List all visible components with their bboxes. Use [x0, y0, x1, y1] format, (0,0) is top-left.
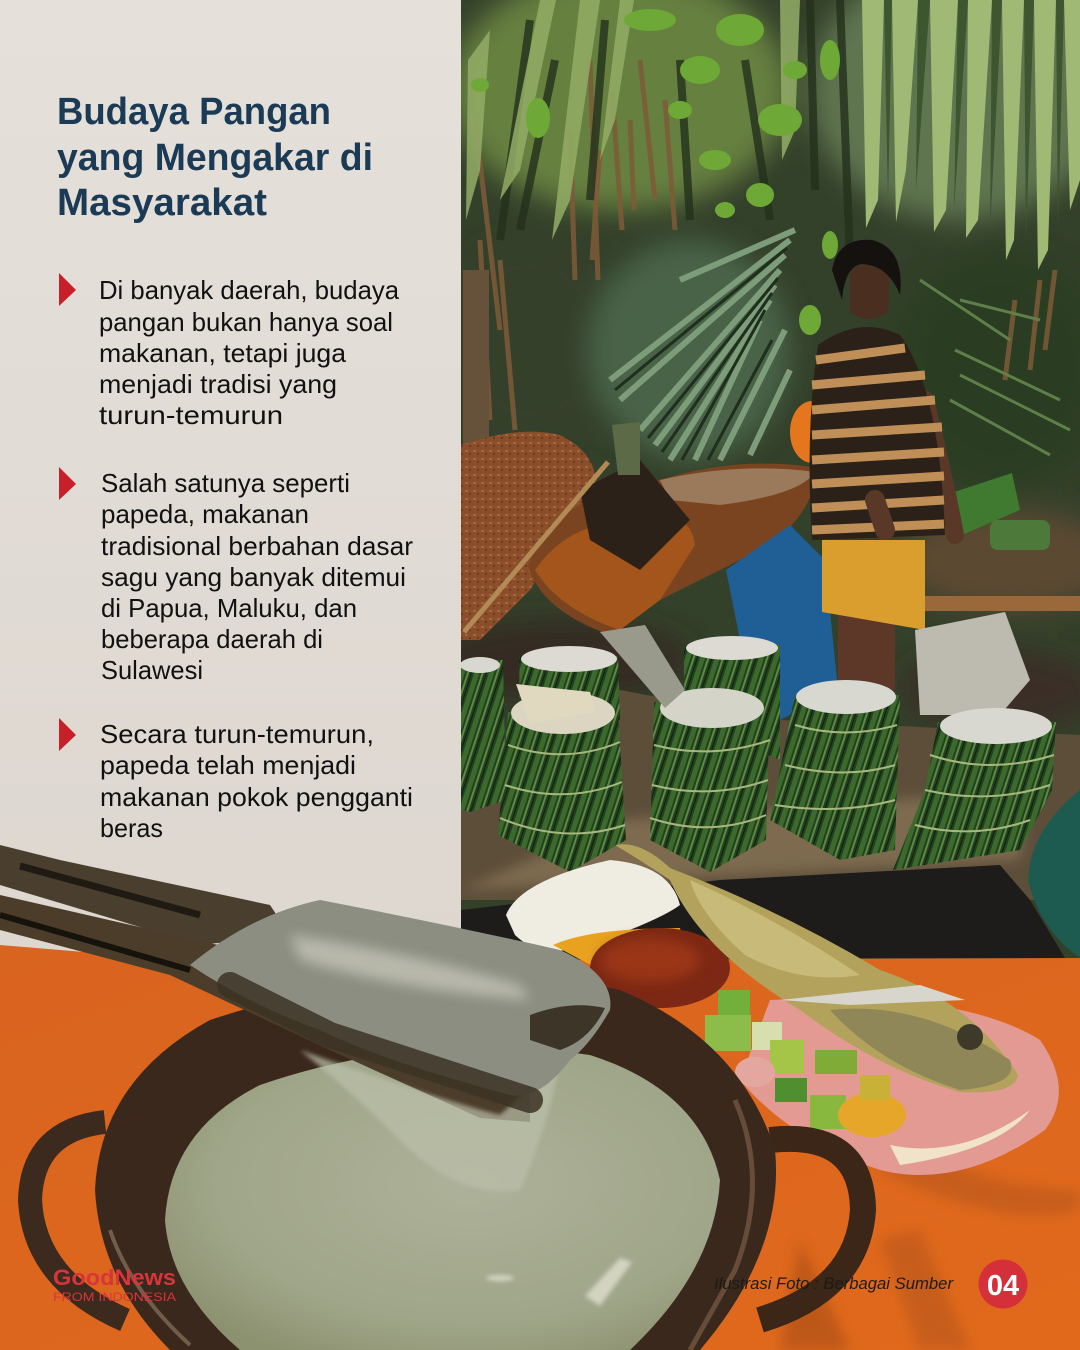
palm leaves right: [862, 0, 1080, 270]
icon: red arrow bullet: [59, 718, 76, 751]
text block 2: Salah satunya seperti: [101, 468, 350, 498]
text block 1: turun-temurun: [99, 400, 283, 430]
wooden sticks lifting papeda: [0, 845, 610, 1191]
clay bowl with papeda: [30, 975, 863, 1350]
sago pile: [461, 432, 596, 640]
text block 3: papeda telah menjadi: [100, 750, 356, 780]
forest background tones: [430, 0, 1080, 730]
pink plate: [740, 998, 1059, 1175]
plate with fish and sambal: [506, 844, 1059, 1175]
logo: GoodNews from Indonesia: GoodNews: [53, 1265, 176, 1290]
text block 2: tradisional berbahan dasar: [101, 531, 413, 561]
photo credit: Ilustrasi Foto : Berbagai Sumber: [714, 1275, 955, 1293]
text block 1: pangan bukan hanya soal: [99, 307, 393, 337]
icon: red arrow bullet: [59, 467, 76, 500]
text block 3: beras: [100, 813, 163, 843]
right side fronds: [920, 280, 1070, 455]
bullet 2: [59, 467, 413, 685]
title: Masyarakat: [57, 182, 267, 224]
bowl outer: [95, 975, 776, 1350]
highlights: [486, 1258, 632, 1306]
woman: [810, 240, 955, 690]
photo: papeda preparation in the forest: [430, 0, 1080, 960]
bench: [925, 596, 1080, 611]
title: yang Mengakar di: [57, 137, 373, 179]
translucent strand: [300, 1050, 560, 1191]
blue barrel: [726, 525, 838, 720]
ground: [461, 690, 1080, 900]
cylinder 5: [650, 688, 770, 872]
green tube: [956, 473, 1020, 534]
text block 1: Di banyak daerah, budaya: [99, 275, 400, 305]
text block 3: [100, 719, 413, 843]
cylinder 6: [770, 680, 900, 860]
cylinder 1: [460, 657, 506, 812]
cylinder 2: [519, 646, 620, 720]
stone on cylinder: [600, 625, 685, 708]
sack: [915, 612, 1030, 715]
cylinder 7: [893, 708, 1056, 870]
text block 2: sagu yang banyak ditemui: [101, 562, 406, 592]
panel: text background: [0, 0, 461, 960]
text block 3: Secara turun-temurun,: [100, 719, 374, 749]
table surface: [0, 945, 1080, 1350]
wooden trough: [528, 464, 818, 635]
cylinder 4: [498, 684, 626, 872]
papeda strand: [190, 900, 610, 1096]
text block 3: makanan pokok pengganti: [100, 782, 413, 812]
dark gaps in canopy: [500, 0, 850, 260]
text block 1: makanan, tetapi juga: [99, 338, 347, 368]
page number badge: [978, 1260, 1028, 1308]
title: Budaya Pangan: [57, 91, 331, 133]
black pan: [461, 865, 1065, 958]
orange bowl: [790, 401, 812, 463]
bullet 1: [59, 273, 400, 430]
bowl handles: [30, 1122, 125, 1320]
text block 1: menjadi tradisi yang: [99, 369, 337, 399]
mid palm frond: [610, 230, 795, 460]
text block 1: [99, 275, 400, 430]
logo: GoodNews from Indonesia: [53, 1265, 176, 1304]
text block 2: di Papua, Maluku, dan: [101, 593, 357, 623]
papeda surface: [165, 1047, 720, 1350]
icon: red arrow bullet: [59, 273, 76, 306]
green net: [1028, 790, 1080, 958]
fried fish: [615, 844, 1018, 1092]
title: [57, 91, 373, 224]
palm leaves left: [466, 0, 800, 240]
text block 2: papeda, makanan: [101, 499, 309, 529]
cylinder 3: [684, 636, 780, 760]
yellow sauce: [553, 928, 690, 970]
sambal: [590, 928, 730, 1008]
hanging brown fronds: [475, 60, 1055, 430]
leaf wrapped sago cylinders: [460, 636, 1056, 872]
page number badge: 04: [987, 1270, 1019, 1302]
white bowl: [506, 860, 680, 951]
text block 2: Sulawesi: [101, 655, 203, 685]
logo: GoodNews from Indonesia: FROM INDONESIA: [53, 1290, 176, 1304]
text block 2: [101, 468, 413, 685]
text block 2: beberapa daerah di: [101, 624, 323, 654]
vegetable salad: [705, 990, 906, 1137]
bullet 3: [59, 718, 413, 843]
tree trunk: [463, 270, 489, 445]
